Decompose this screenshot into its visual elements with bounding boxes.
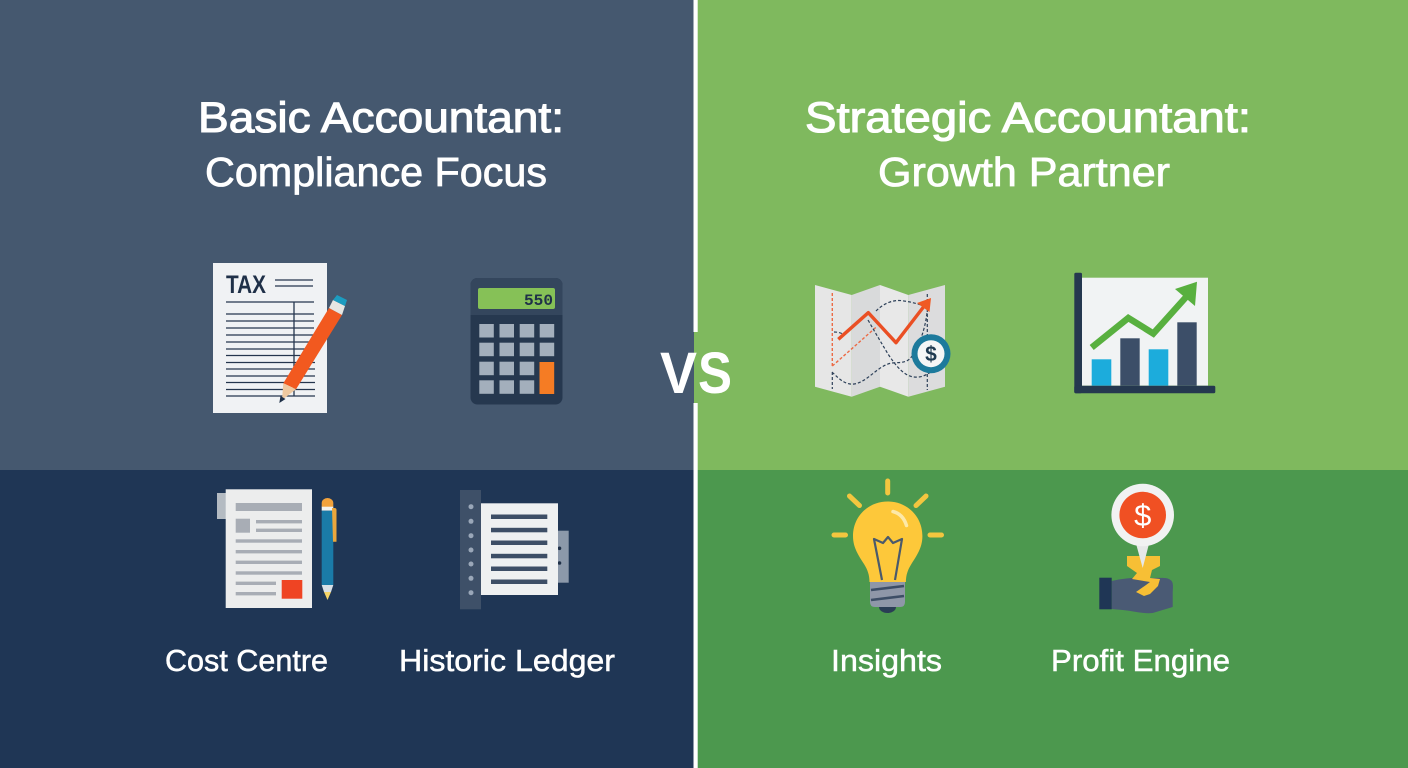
icon: hand holding profit pin: $ <box>1134 498 1151 533</box>
vs badge: V <box>660 341 697 406</box>
label: profit engine: Profit Engine <box>1051 643 1230 678</box>
heading: strategic accountant <box>805 94 1251 195</box>
panel: basic accountant upper <box>0 0 694 470</box>
vs badge <box>660 341 732 406</box>
icon: calculator <box>470 278 562 404</box>
heading: basic accountant <box>198 94 564 195</box>
icon: growth bar chart <box>1074 273 1215 393</box>
icon: tax form with pencil: TAX <box>226 271 266 299</box>
label: insights: Insights <box>831 643 942 678</box>
panel: strategic accountant upper <box>694 0 1408 470</box>
panel: strategic accountant lower <box>694 470 1408 768</box>
label: cost centre: Cost Centre <box>165 643 328 678</box>
icon: light bulb <box>834 481 942 613</box>
panel: basic accountant lower <box>0 470 694 768</box>
icon: folded map with route: $ <box>925 343 937 366</box>
vs badge: S <box>698 341 732 406</box>
icon: calculator: 550 <box>524 292 553 310</box>
icon: historic ledger <box>460 490 569 609</box>
icon: folded map with route <box>815 285 950 397</box>
heading: strategic accountant: Strategic Accountant: <box>805 94 1251 142</box>
heading: basic accountant: Basic Accountant: <box>198 94 564 142</box>
heading: strategic accountant: Growth Partner <box>878 149 1170 195</box>
icon: tax form with pencil <box>213 263 347 413</box>
icon: hand holding profit pin <box>1099 484 1174 613</box>
label: historic ledger: Historic Ledger <box>399 643 615 678</box>
icon: report with pen <box>217 489 336 608</box>
heading: basic accountant: Compliance Focus <box>205 149 547 195</box>
